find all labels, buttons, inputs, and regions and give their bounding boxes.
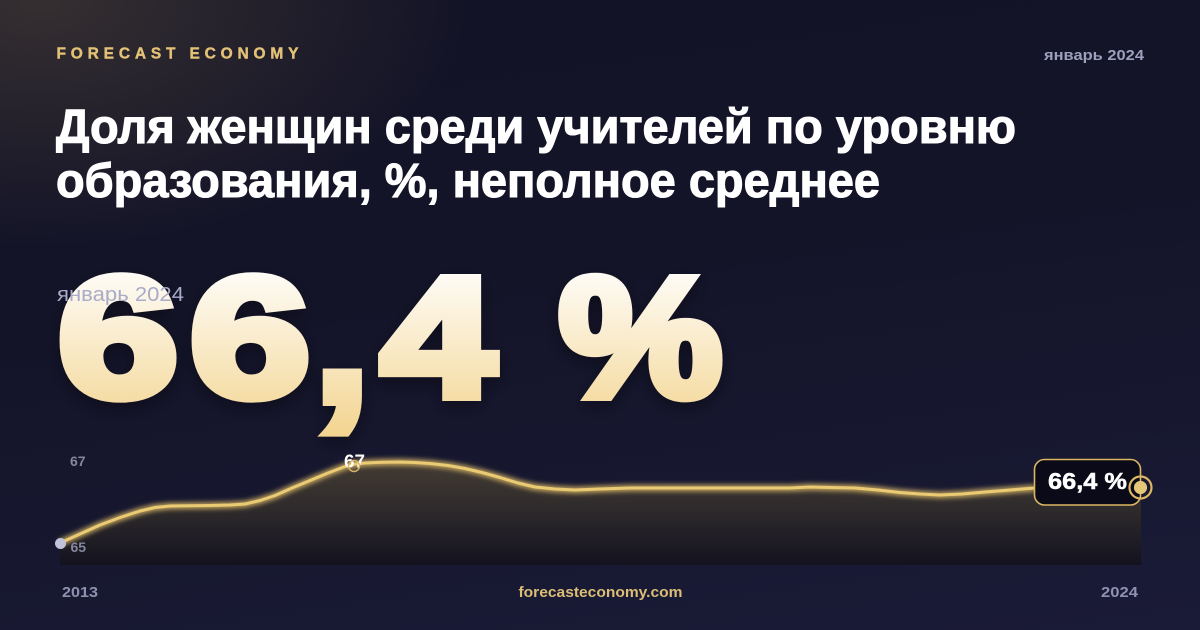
x axis end year: 2024 bbox=[1101, 584, 1139, 601]
date subtitle overlapping value: январь 2024 bbox=[57, 284, 184, 306]
end marker bbox=[1130, 476, 1152, 498]
big value: 6 bbox=[190, 243, 310, 433]
big value: % bbox=[559, 243, 722, 433]
line chart bbox=[55, 452, 1152, 565]
big value: 4 bbox=[381, 243, 495, 433]
chart line glow bbox=[60, 462, 1035, 543]
start point bbox=[55, 538, 66, 549]
big value: 6 bbox=[58, 243, 178, 433]
current value callout: 66,4 % bbox=[1048, 468, 1127, 494]
title: Доля женщин среди учителей по уровню bbox=[56, 101, 1016, 154]
title bbox=[56, 101, 1016, 208]
source site: forecasteconomy.com bbox=[518, 584, 682, 601]
date top right: январь 2024 bbox=[1044, 47, 1145, 64]
big value: , bbox=[312, 223, 372, 444]
peak label: 67 bbox=[344, 452, 365, 472]
title: образования, %, неполное среднее bbox=[56, 155, 880, 208]
x axis start year: 2013 bbox=[62, 584, 98, 601]
current value callout bbox=[1034, 460, 1140, 505]
axis label min: 65 bbox=[70, 539, 86, 555]
brand label: FORECAST ECONOMY bbox=[56, 46, 299, 62]
peak marker bbox=[348, 460, 360, 472]
chart area fill bbox=[60, 462, 1141, 565]
chart line bbox=[60, 462, 1035, 543]
big value bbox=[58, 223, 722, 444]
axis label max: 67 bbox=[70, 453, 86, 469]
